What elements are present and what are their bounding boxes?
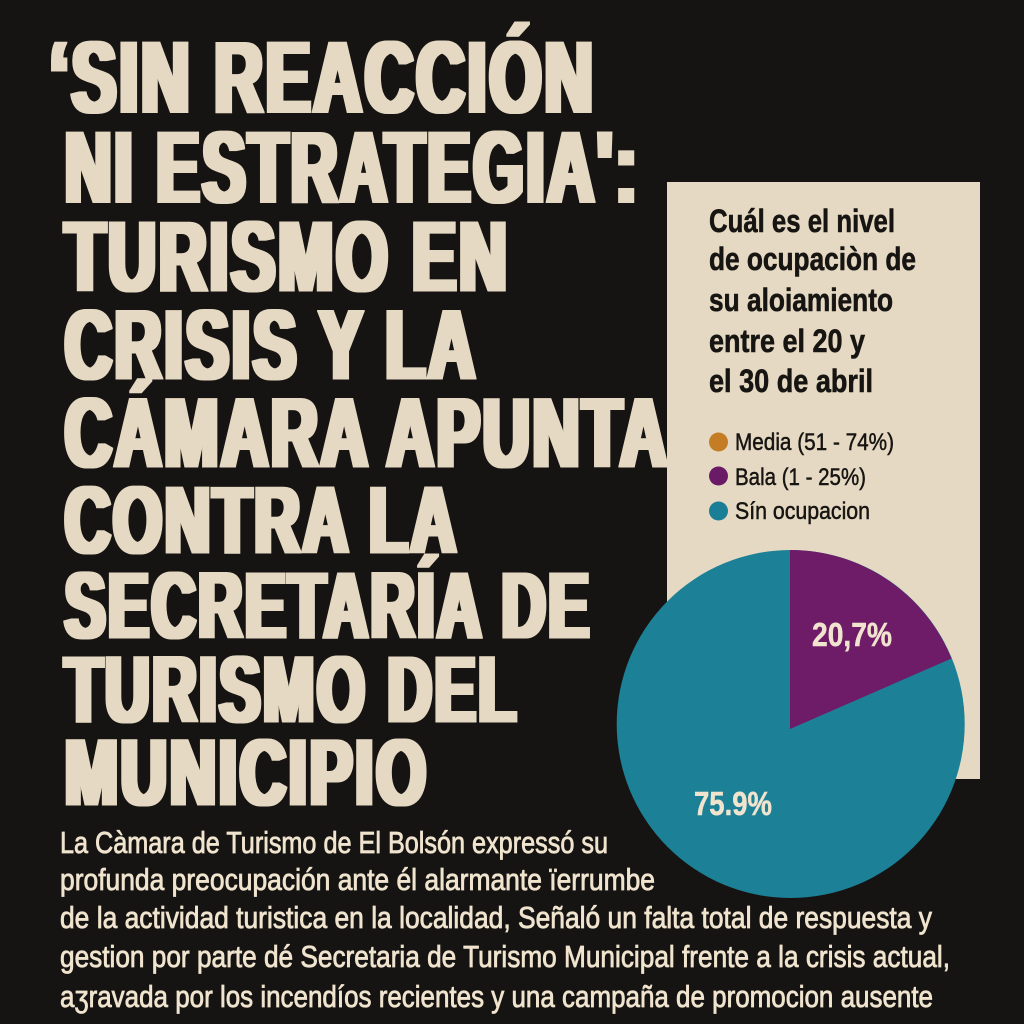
title: ‘SIN REACCIÓN — [50, 20, 596, 134]
title: CRISIS Y LA — [65, 289, 478, 400]
panel heading: el 30 de abril — [709, 363, 873, 399]
body text — [60, 825, 950, 1014]
pie chart: 75.9% — [694, 785, 772, 822]
panel: occupancy survey — [667, 182, 980, 779]
pie chart — [617, 550, 965, 898]
pie chart: 20,7% — [812, 616, 892, 653]
legend: Sín ocupacion — [735, 498, 870, 525]
panel heading: de ocupaciòn de — [709, 241, 916, 277]
panel heading — [709, 203, 916, 399]
title: MUNICIPIO — [65, 720, 429, 826]
panel heading: Cuál es el nivel — [709, 203, 895, 239]
title: SECRETARÍA DE — [65, 553, 592, 659]
legend: Media (51 - 74%) — [735, 429, 894, 456]
body text: La Càmara de Turismo de El Bolsón expressó su — [60, 825, 608, 860]
legend: Bala (1 - 25%) — [735, 464, 866, 491]
title — [50, 20, 670, 826]
body text: profunda preocupación ante él alarmante ïerrumbe — [60, 862, 655, 897]
panel heading: entre el 20 y — [709, 323, 865, 359]
title: TURISMO EN — [65, 201, 510, 313]
title: TURISMO DEL — [65, 637, 519, 743]
legend — [709, 429, 894, 525]
title: NI ESTRATEGIA': — [65, 110, 640, 224]
title: CÁMARA APUNTA — [65, 377, 670, 488]
title: CONTRA LA — [65, 467, 459, 574]
panel heading: su aloiamiento — [709, 282, 893, 318]
